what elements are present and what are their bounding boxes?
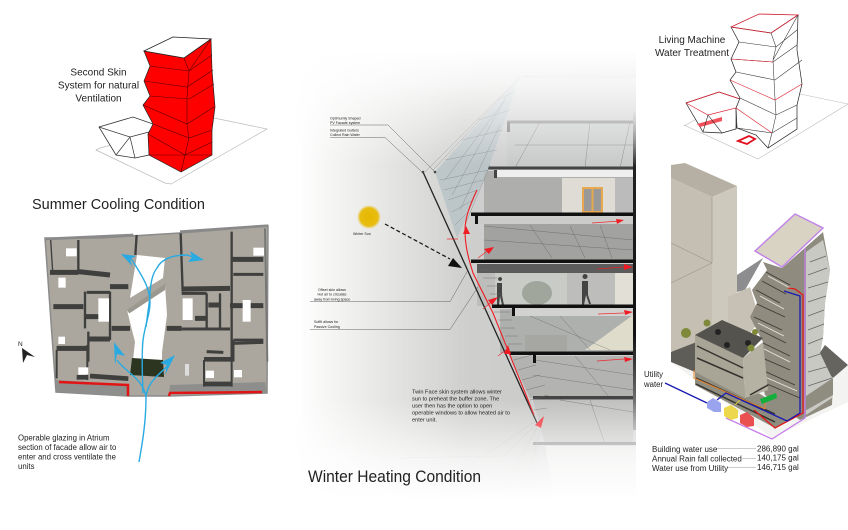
diagram: axonometric water system [665,163,848,439]
room with door [484,171,633,214]
table: water statistics: Water use from Utility [652,464,728,473]
base block [671,345,848,438]
arrow: winter sun rays [385,224,462,268]
diagram: living machine tower [684,14,848,159]
text: operable glazing note: units [18,462,35,471]
context block [671,163,737,352]
title: winter heating: Winter Heating Condition [308,467,481,486]
table: water statistics: 146,715 gal [757,463,799,472]
water pipes [665,248,805,439]
table: water statistics: Building water use [652,445,718,454]
airflow arrows [114,251,204,462]
louvres [480,270,548,410]
text: twin face note: sun to preheat the buffer zone. The [412,397,499,403]
label: utility water: Utility [644,370,663,379]
label: utility water: water [643,380,663,389]
callouts: facade system: Integrated Gutters [330,128,359,132]
label: living machine [655,35,729,59]
text: twin face note: Twin Face skin system allows winter [412,390,502,396]
callouts: facade system: Optimumly Shaped [330,116,361,120]
callouts: facade system [310,116,478,330]
text: twin face note: operable windows to allow heated air to [412,411,510,417]
icon: north arrow [18,341,35,363]
table: water statistics: Annual Rain fall collected [652,454,742,464]
table: water statistics [652,444,799,473]
atrium void [130,255,165,298]
title: summer cooling: Summer Cooling Condition [32,196,205,213]
label: second skin: Second Skin [70,68,127,78]
callouts: facade system: Passive Cooling [314,325,340,329]
table: water statistics: 140,175 gal [757,454,799,462]
icon: winter sun [353,205,381,236]
operable glazing red lines [59,382,262,396]
text: twin face note [412,390,510,424]
text: twin face note: user then has the option to open [412,404,492,410]
callouts: facade system: Soffit allows for [314,320,339,324]
table: water statistics: 286,890 gal [757,444,799,454]
section interior [470,75,636,500]
PV facade mesh [425,77,520,238]
tower mass [750,232,833,420]
floor slabs [471,75,636,445]
podium [681,320,775,422]
outer facade line [423,172,537,423]
podium plinth [695,367,833,428]
callouts: facade system: Offset skin allows [318,288,346,292]
diagram: second skin tower [96,37,267,184]
callouts: facade system: PV Facade system [330,121,360,125]
fades [295,50,636,165]
floor plan [45,226,268,396]
red air path [447,190,633,428]
text: operable glazing note: section of facade allow air to [18,443,117,452]
roof outline [755,214,823,267]
text: operable glazing note [18,434,117,471]
text: twin face note: enter unit. [412,418,437,424]
garden [130,358,164,377]
water tanks [707,393,777,427]
label: second skin [58,68,139,104]
panel: winter section [295,50,636,500]
label: living machine: Water Treatment [655,48,729,59]
label: second skin: Ventilation [75,94,122,104]
callouts: facade system: away from living space [314,298,350,302]
text: operable glazing note: Operable glazing in Atrium [18,434,109,442]
label: second skin: System for natural [58,80,139,92]
label: utility water [643,370,663,389]
text: operable glazing note: enter and cross ventilate the [18,452,116,462]
lower facade fan [400,422,540,490]
callouts: facade system: Collect Rain Water [330,133,361,137]
icon: winter sun: Winter Sun [353,232,371,236]
callouts: facade system: Hot air to circulate [318,292,346,296]
icon: north arrow: N [18,341,23,348]
people [497,274,591,305]
label: living machine: Living Machine [659,35,726,46]
